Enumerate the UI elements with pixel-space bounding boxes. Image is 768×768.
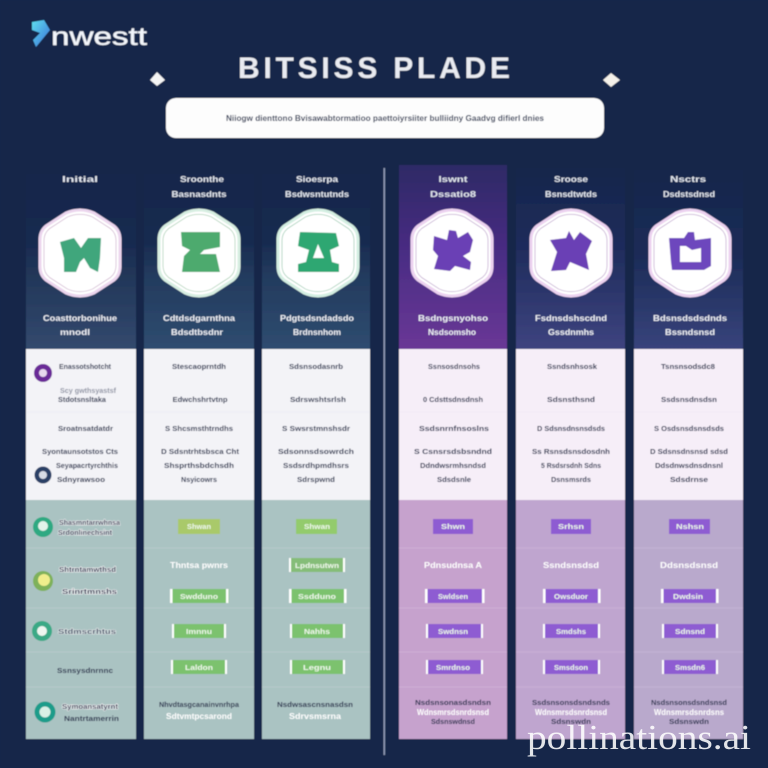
feature labels: Enassotshotcht bbox=[59, 362, 111, 371]
badge bbox=[669, 519, 710, 534]
logo bbox=[32, 20, 147, 51]
badge bbox=[289, 558, 345, 572]
feature labels: Sdnyrawsoo bbox=[57, 475, 105, 484]
header band bbox=[516, 165, 625, 349]
badge: Lpdnsutwn bbox=[295, 563, 339, 570]
badge bbox=[170, 589, 229, 603]
hexagon badge bbox=[650, 210, 730, 296]
icon: green circle bbox=[33, 517, 53, 537]
feature labels: Shasmntarrwhnsa bbox=[59, 518, 121, 527]
plan name: Bsdngsnyohso bbox=[418, 314, 488, 323]
hexagon badge bbox=[278, 210, 358, 296]
icon: star glyph bbox=[550, 231, 592, 271]
feature labels: Symoansatyrnt bbox=[62, 702, 119, 711]
header band bbox=[399, 165, 507, 349]
row separators bbox=[262, 412, 370, 687]
feature values: Sdsnsodasnrb bbox=[289, 362, 343, 371]
feature values: Sdrspwnd bbox=[297, 475, 335, 484]
badge bbox=[543, 660, 600, 674]
feature values: 0 Cdsttsdnsdnsh bbox=[423, 395, 483, 404]
icon: right diamond bbox=[603, 73, 620, 87]
badge bbox=[290, 660, 345, 674]
white features card bbox=[26, 349, 136, 500]
heading line 2: Bsdwsntutnds bbox=[285, 190, 350, 199]
badge: Smsdson bbox=[554, 665, 588, 672]
row separators bbox=[144, 412, 254, 687]
title: BITSISS PLADE bbox=[238, 52, 510, 85]
badge: Legnu bbox=[303, 665, 331, 672]
feature values: D Sdsnsdnsnsdsds bbox=[537, 424, 605, 433]
badge bbox=[290, 624, 345, 638]
heading: Initial bbox=[62, 175, 98, 184]
badge: Shwn bbox=[441, 524, 465, 531]
panel: column 2 bbox=[144, 165, 254, 739]
plan name: Fsdnsdshscdnd bbox=[535, 314, 607, 323]
feature values bbox=[161, 362, 240, 484]
heading: Nsctrs bbox=[670, 175, 707, 184]
feature values: Tsnsnsodsdc8 bbox=[661, 362, 715, 371]
badge label: Ddsnsdsnsd bbox=[660, 561, 718, 570]
feature values: Sdsonnsdsowrdch bbox=[278, 447, 354, 456]
badge: Smdshs bbox=[556, 629, 586, 636]
feature values: Stescaoprntdh bbox=[172, 362, 226, 371]
badge bbox=[661, 589, 718, 603]
badge bbox=[433, 519, 473, 534]
icon: green check circle bbox=[32, 621, 52, 641]
footer note: Sdsnswdnsd bbox=[431, 717, 475, 726]
heading: Sroose bbox=[554, 175, 589, 184]
badge label: Pdnsudnsa A bbox=[424, 561, 482, 570]
heading: Sroonthe bbox=[180, 175, 225, 184]
heading line 2: Bsnsdtwtds bbox=[545, 190, 598, 199]
plan note: Brdnsnhom bbox=[293, 328, 341, 337]
feature labels: Sroatnsatdatdr bbox=[58, 424, 113, 433]
row separators bbox=[516, 412, 625, 687]
icon: purple circle bbox=[34, 364, 52, 382]
footer note: Nsdsnsonasdsndsn bbox=[415, 698, 491, 707]
watermark: pollinations.ai bbox=[527, 718, 751, 757]
footer note: Nsdwsascnsnasdsn bbox=[277, 700, 353, 709]
row separators bbox=[399, 412, 507, 687]
feature values: Ssndsnhsosk bbox=[547, 362, 598, 371]
feature values: Ssdsnrnfnsoslns bbox=[419, 424, 489, 433]
panel: column 4 bbox=[399, 165, 507, 739]
badge bbox=[425, 589, 484, 603]
badge bbox=[296, 519, 337, 534]
icon: yellow circle bbox=[33, 571, 53, 591]
icon: M glyph bbox=[60, 238, 101, 272]
feature values: Sdsdsnle bbox=[437, 475, 471, 484]
feature values: Ssdsrdhpmdhsrs bbox=[283, 461, 349, 470]
hexagon badge bbox=[531, 210, 611, 296]
footer note: Sdtvmtpcsarond bbox=[166, 712, 232, 721]
panel: column 6 bbox=[634, 165, 743, 739]
icon: navy circle bbox=[34, 466, 52, 484]
icon: E glyph bbox=[181, 232, 220, 272]
feature labels: Ssnsysdnrnnc bbox=[57, 666, 113, 675]
feature values bbox=[650, 362, 728, 484]
badge: Nshsn bbox=[676, 524, 704, 531]
subtitle text: Niiogw dienttono Bvisawabtormatioo paettoiyrsiiter bulliidny Gaadvg difierl dnies bbox=[226, 113, 544, 123]
badge: Swdduno bbox=[180, 594, 218, 601]
feature values: D Sdsnsdnsnsd sdsd bbox=[650, 447, 728, 456]
feature labels: Stdotsnsltaka bbox=[58, 395, 107, 404]
tinted features card bbox=[262, 500, 370, 739]
row separators bbox=[634, 412, 743, 687]
badge bbox=[543, 624, 600, 638]
badge: Sdnsnd bbox=[675, 629, 705, 636]
feature values: Edwchshrtvtnp bbox=[172, 395, 228, 404]
feature values: D Sdsntrhtsbsca Cht bbox=[161, 447, 240, 456]
tinted features card bbox=[144, 500, 254, 739]
badge label: Thntsa pwnrs bbox=[170, 561, 229, 570]
heading line 2: Dsdstsdnsd bbox=[663, 190, 715, 199]
footer note: Sdsnswdn bbox=[669, 717, 709, 726]
badge: Swldsen bbox=[438, 594, 468, 601]
feature values: S Osdsnsdsnsdsds bbox=[654, 424, 724, 433]
icon: tower glyph bbox=[298, 232, 339, 272]
feature values: Sdsdrnse bbox=[670, 475, 708, 484]
header band bbox=[262, 165, 370, 349]
badge bbox=[551, 519, 591, 534]
badge: Smsdn6 bbox=[675, 665, 705, 672]
badge bbox=[426, 660, 483, 674]
badge: Swdnsn bbox=[438, 629, 468, 636]
footer note bbox=[532, 698, 610, 726]
plan note: Bdsdtbsdnr bbox=[171, 328, 223, 337]
feature values: Dsnsmsrds bbox=[551, 475, 591, 484]
feature values: S Csnsrsdsbsndnd bbox=[414, 447, 492, 456]
feature labels: Scy gwthsyastsf bbox=[60, 386, 116, 395]
badge bbox=[289, 589, 346, 603]
badge: Laldon bbox=[185, 665, 213, 672]
badge: Dwdsin bbox=[673, 594, 703, 601]
footer note: Wdnsmrsdsnrdsnsd bbox=[417, 708, 489, 717]
feature values: Ssnsosdnsohs bbox=[428, 362, 480, 371]
heading line 2: Basnasdnts bbox=[172, 190, 227, 199]
badge bbox=[426, 624, 483, 638]
plan name: Cdtdsdgarnthna bbox=[163, 314, 236, 323]
feature values bbox=[532, 362, 610, 484]
plan note: Gssdnmhs bbox=[548, 328, 595, 337]
feature values: Shsprthsbdchsdh bbox=[164, 461, 234, 470]
icon: left diamond bbox=[150, 72, 165, 86]
feature labels: Syontaunsotstos Cts bbox=[42, 447, 118, 456]
badge bbox=[662, 660, 718, 674]
panel: column 5 bbox=[516, 165, 625, 739]
logo wordmark: nwestt bbox=[51, 23, 147, 51]
hexagon badge bbox=[159, 210, 239, 296]
feature labels: Srinrtmnshs bbox=[62, 587, 117, 596]
plan note: Nsdsomsho bbox=[428, 328, 476, 337]
white features card bbox=[399, 349, 507, 500]
heading line 2: Dssatio8 bbox=[430, 190, 477, 199]
header band bbox=[26, 165, 136, 349]
plan name: Pdgtsdsndadsdo bbox=[280, 314, 354, 323]
footer note: Sdsnswdn bbox=[551, 717, 591, 726]
badge: Nahhs bbox=[304, 629, 330, 636]
badge: Shwan bbox=[187, 524, 211, 531]
feature values: Sdrswshtsrlsh bbox=[290, 395, 346, 404]
feature values: Ddndwsrmhsndsd bbox=[420, 461, 486, 470]
badge: Smrdnso bbox=[436, 665, 470, 672]
tinted features card bbox=[516, 500, 625, 739]
tinted features card bbox=[399, 500, 507, 739]
icon: logo gem bbox=[32, 20, 50, 47]
footer note: Wdnsmrsdsnrdsns bbox=[654, 708, 725, 717]
plan note: mnodl bbox=[60, 328, 90, 337]
footer note: Sdrvsmsrna bbox=[289, 712, 342, 721]
badge: Shwan bbox=[304, 524, 330, 531]
badge bbox=[662, 624, 718, 638]
feature values: Sdsnsthsnd bbox=[547, 395, 595, 404]
tinted features card bbox=[26, 500, 136, 739]
badge: Srhsn bbox=[558, 524, 584, 531]
panel: column 3 bbox=[262, 165, 370, 739]
footer note bbox=[651, 698, 727, 726]
badge bbox=[543, 589, 600, 603]
white features card bbox=[634, 349, 743, 500]
footer note: Nsdsnsonsdsndsnsd bbox=[651, 698, 727, 707]
badge bbox=[178, 519, 220, 534]
feature values: Nsyicowrs bbox=[181, 475, 217, 484]
feature values: S Shcsmsthtrndhs bbox=[165, 424, 233, 433]
heading: Sioesrpa bbox=[296, 175, 339, 184]
panel: column 1 bbox=[26, 165, 136, 739]
plan name: Coasttorbonihue bbox=[43, 314, 118, 323]
footer note: Wdnsmrsdsnrdsnsd bbox=[535, 708, 607, 717]
feature values: Ddsdnwsdnsdnsnl bbox=[655, 461, 723, 470]
hexagon badge bbox=[412, 210, 492, 296]
row separators bbox=[26, 412, 136, 687]
feature values bbox=[414, 362, 492, 484]
footer note bbox=[159, 700, 240, 721]
feature labels: Seyapacrtyrchthis bbox=[56, 461, 118, 470]
badge bbox=[172, 624, 226, 638]
feature values: 5 Rsdsrsdnh Sdns bbox=[541, 461, 601, 470]
footer note: Nhvdtasgcanainvnrhpa bbox=[159, 700, 240, 709]
feature values bbox=[278, 362, 354, 484]
badge: Imnnu bbox=[186, 629, 212, 636]
feature labels: Srdonlinechsint bbox=[58, 528, 112, 537]
white features card bbox=[516, 349, 625, 500]
badge bbox=[171, 660, 227, 674]
hexagon badge bbox=[40, 210, 120, 296]
header band bbox=[144, 165, 254, 349]
feature values: S Swsrstmnshsdr bbox=[282, 424, 350, 433]
feature labels: Shtrntamwthsd bbox=[59, 565, 116, 574]
feature values: Ss Rsnsdsnsdosdnh bbox=[532, 447, 610, 456]
icon: teal circle bbox=[34, 702, 56, 722]
feature labels: Stdmscrhtus bbox=[58, 627, 116, 636]
divider bbox=[384, 168, 385, 755]
white features card bbox=[262, 349, 370, 500]
footer note: Ssdsnsonsdsndsnds bbox=[532, 698, 610, 707]
heading: Iswnt bbox=[438, 175, 468, 184]
icon: cross glyph bbox=[433, 230, 473, 271]
feature labels: Nantrtamerrin bbox=[64, 714, 119, 723]
footer note bbox=[415, 698, 491, 726]
subtitle banner bbox=[166, 98, 604, 138]
tinted features card bbox=[634, 500, 743, 739]
white features card bbox=[144, 349, 254, 500]
badge: Ssdduno bbox=[298, 594, 336, 601]
badge: Owsduor bbox=[554, 594, 588, 601]
icon: house glyph bbox=[669, 232, 711, 270]
plan note: Bssndsnsd bbox=[665, 328, 715, 337]
plan name: Bdsnsdsdsdnds bbox=[653, 314, 728, 323]
feature labels bbox=[42, 362, 121, 723]
feature values: Ssdsnsdnsdsn bbox=[661, 395, 717, 404]
footer note bbox=[277, 700, 353, 721]
badge label: Ssndsnsdsd bbox=[543, 561, 599, 570]
header band bbox=[634, 165, 743, 349]
